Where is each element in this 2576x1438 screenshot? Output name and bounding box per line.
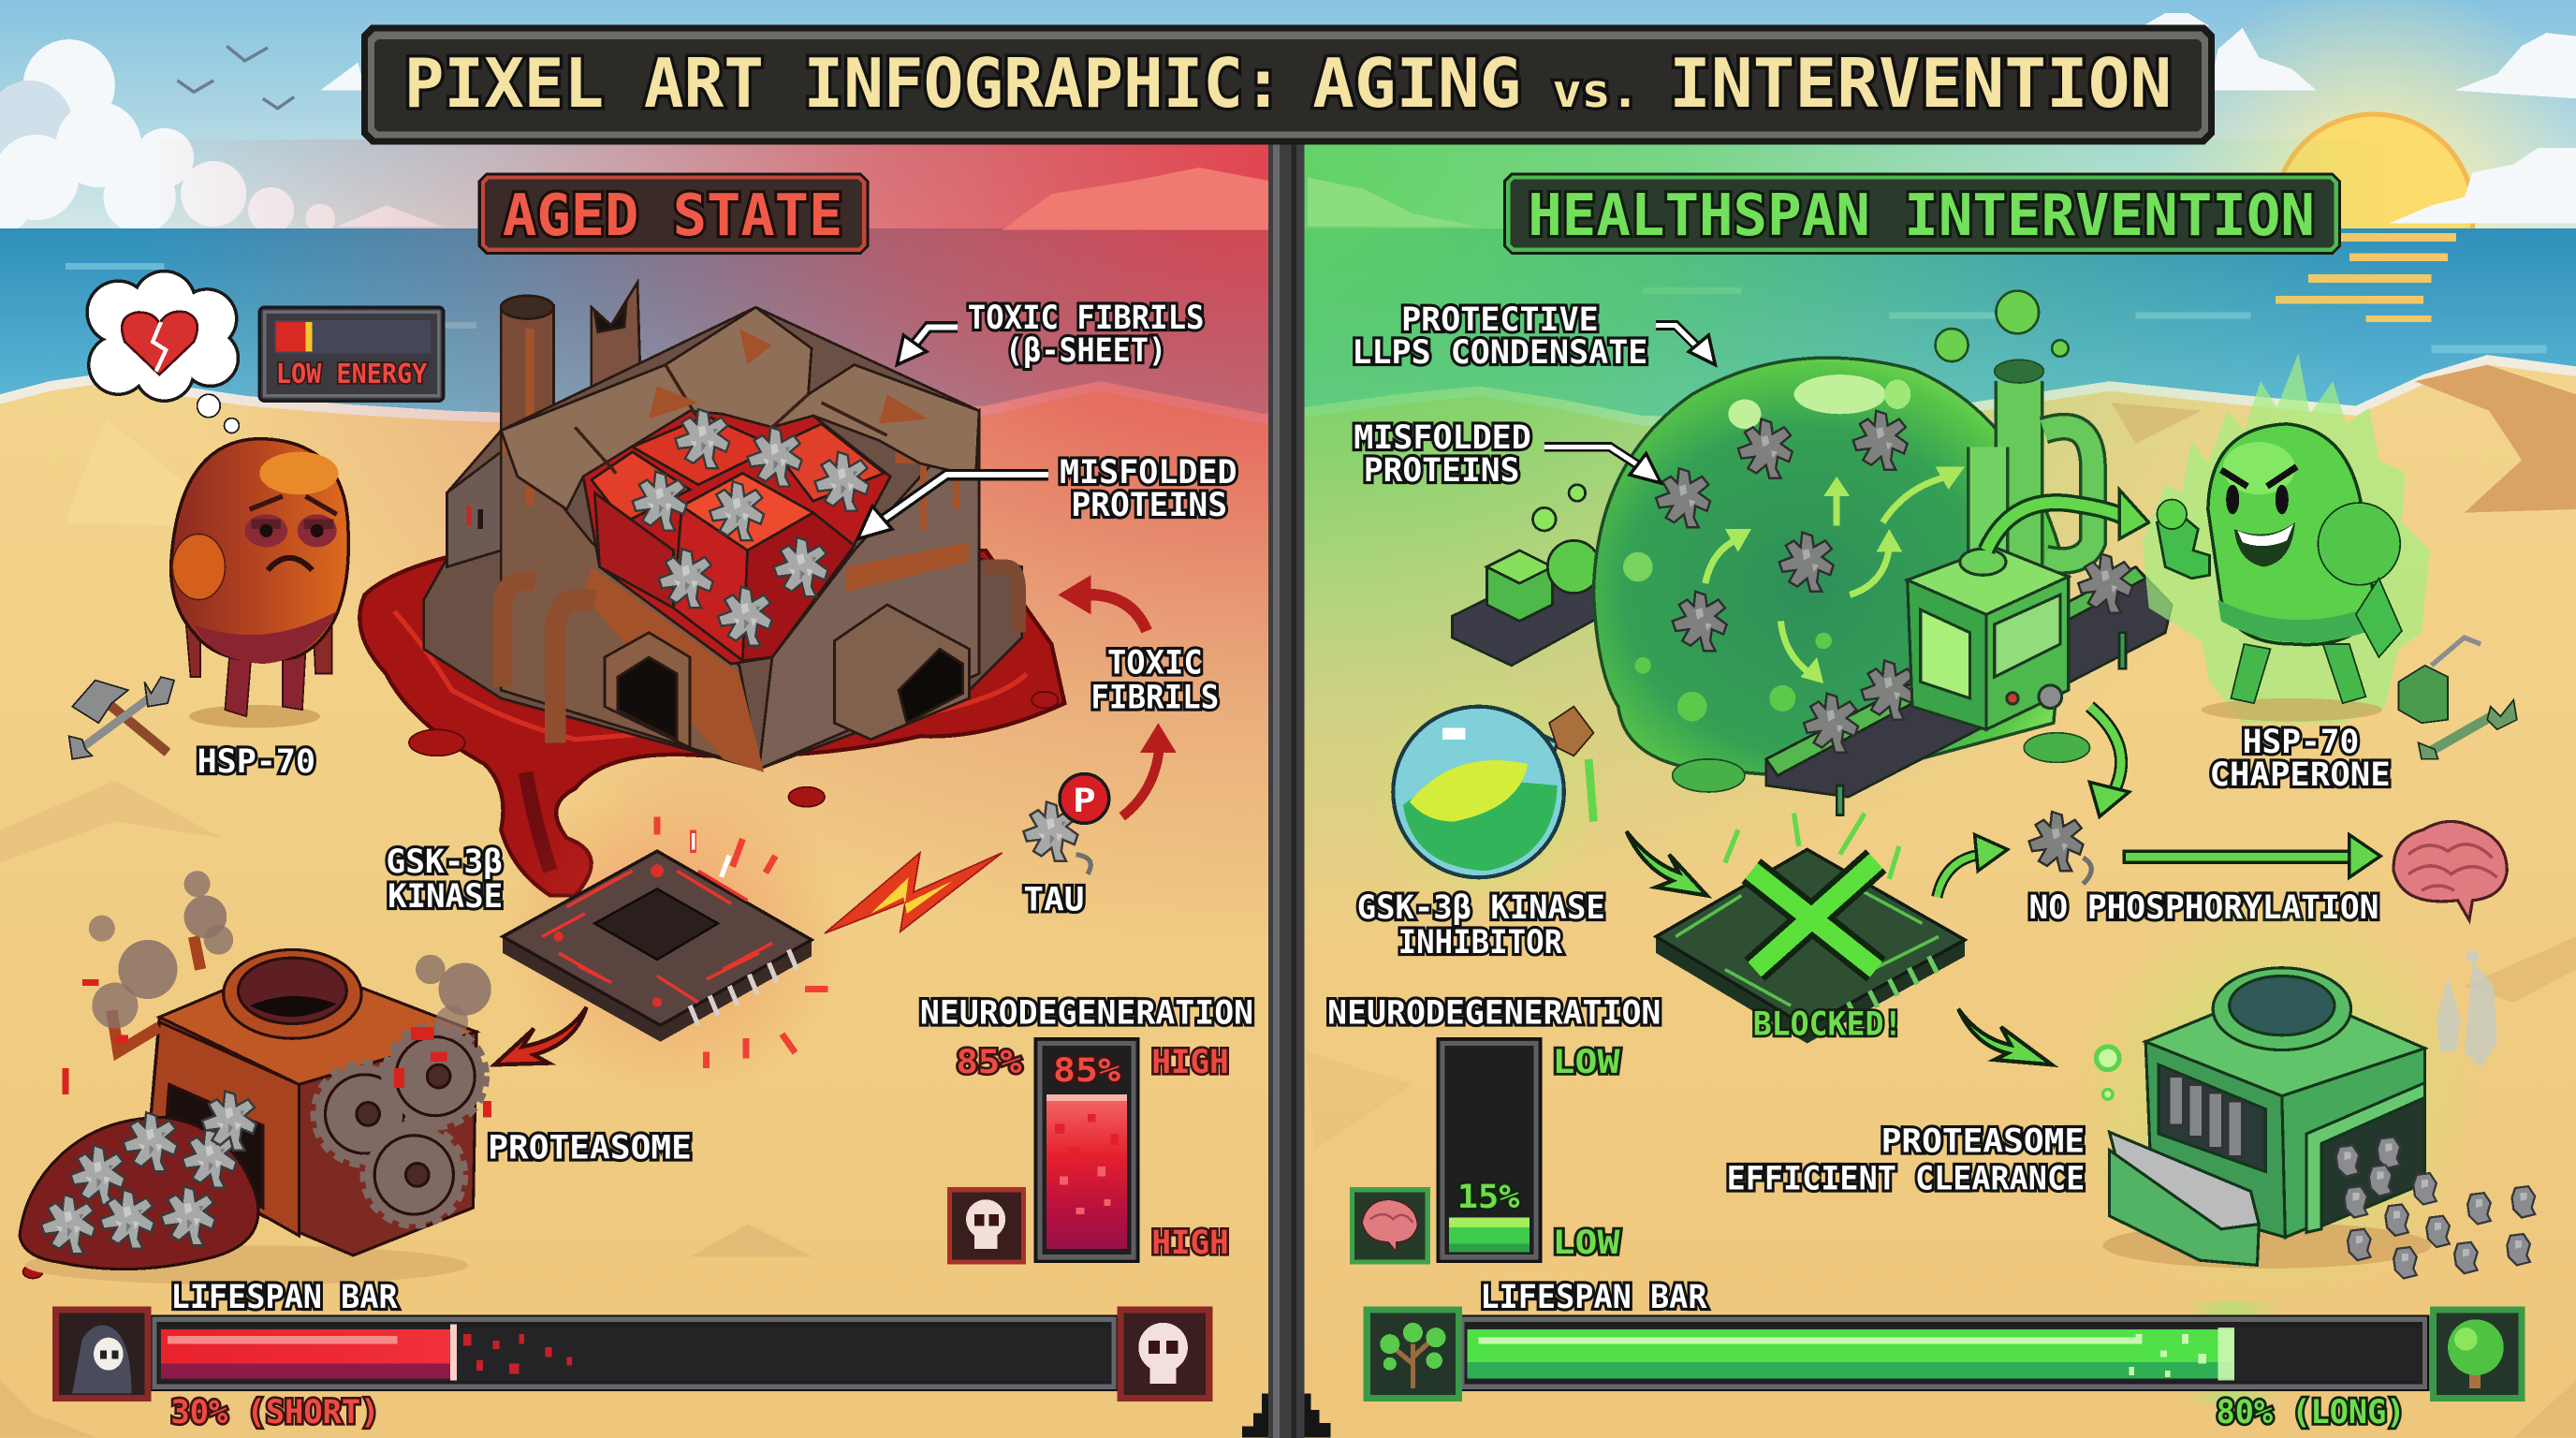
callout: misfolded proteins [857,453,1237,539]
tau protein with phosphate: P [1073,782,1096,820]
colour wash left [201,139,1268,893]
clearance machine [1908,547,2069,729]
proteasome funnel [224,949,361,1038]
title banner: AGING [1312,44,1521,123]
heading: healthspan intervention: HEALTHSPAN INTERVENTION [1528,183,2315,249]
icon: reaper tile [56,1310,148,1399]
callout: toxic fibrils cycle [1058,575,1219,816]
chip: overactive GSK-3β kinase [501,756,846,1101]
label: proteasome efficient clearance: EFFICIENT CLEARANCE [1727,1160,2085,1198]
gears [315,1027,485,1225]
neurodegeneration meter: low: LOW [1553,1043,1621,1081]
chip: blocked kinase [1656,814,1965,1043]
toxic protein clusters [633,409,869,646]
factory doors [605,605,970,748]
center divider [1242,139,1331,1438]
rust streaks [503,440,974,772]
arrow: kinase to proteasome [494,1007,587,1064]
main conveyor [1766,553,2172,815]
label: proteasome: PROTEASOME [488,1128,692,1167]
icon: broken tools [69,677,174,759]
arrow: kinase to proteasome [1958,1009,2052,1064]
sun [2152,0,2576,419]
callout: toxic fibrils cycle: TOXIC [1107,644,1203,682]
callout: toxic fibrils beta sheet: TOXIC FIBRILS [968,299,1204,337]
clouds left [0,39,444,233]
lifespan bar: short: LIFESPAN BAR [171,1278,399,1316]
panel: healthspan intervention [1327,291,2535,1431]
exposed red core [583,411,890,664]
machine exit door [2306,1083,2425,1232]
neurodegeneration meter: high [920,993,1253,1262]
pipes [503,567,1018,742]
clogged protein pile [20,1091,258,1269]
ruined factory [424,283,1022,772]
label: proteasome efficient clearance [1727,1122,2085,1198]
callout: misfolded proteins right: MISFOLDED [1354,418,1531,457]
cleared protein pellets [2336,1137,2535,1278]
neurodegeneration meter: high: HIGH [1151,1224,1229,1262]
panel: aged state [20,270,1253,1431]
icon: sapling tile [1367,1310,1459,1399]
machine grinder opening [2159,1064,2265,1171]
arrow: machine to hero [1986,490,2149,550]
label: blocked: BLOCKED! [1753,1005,1902,1044]
callout: protective condensate [1352,301,1715,372]
callout: toxic fibrils cycle: FIBRILS [1090,678,1219,716]
efficient proteasome machine [2070,896,2481,1306]
smoke and sparks [63,871,491,1117]
title banner: PIXEL ART INFOGRAPHIC: [404,44,1283,123]
neurodegeneration meter: low: NEURODEGENERATION [1327,993,1661,1032]
tau: no phosphorylation [2029,812,2378,927]
callout: misfolded proteins: MISFOLDED [1060,453,1237,492]
heading: aged state: AGED STATE [503,183,842,249]
green pipes [1988,360,2093,567]
label: GSK-3β kinase [386,843,503,916]
lifespan bar: long: 80% (LONG) [2217,1393,2405,1431]
LLPS condensate blob [1593,358,2089,792]
neurodegeneration meter: high: 85% [956,1043,1022,1081]
chimneys [501,283,642,487]
tau protein with phosphate [1023,774,1109,874]
label: HSP-70: HSP-70 [198,742,315,781]
machine funnel [2213,968,2351,1050]
character: strong HSP-70 chaperone [2143,353,2430,723]
callout: toxic fibrils beta sheet [897,299,1204,370]
clouds right [2143,13,2576,224]
label: tau: TAU [1023,880,1084,918]
neurodegeneration meter: high: HIGH [1151,1043,1229,1081]
neurodegeneration meter: high: NEURODEGENERATION [920,993,1253,1032]
birds [178,46,294,109]
icon: lightning bolt [825,853,1003,933]
callout: protective condensate: LLPS CONDENSATE [1352,333,1647,372]
tinted clouds [1003,168,1479,230]
flask: kinase inhibitor potion [1368,675,1605,912]
icon: grown tree tile [2433,1310,2522,1399]
title banner: INTERVENTION [1669,44,2172,123]
lifespan bar: long [1459,1278,2428,1431]
sun reflection [2276,233,2456,322]
thought bubble: broken heart [85,270,240,433]
callout: misfolded proteins: PROTEINS [1071,486,1227,524]
side pipes [111,936,200,1051]
lifespan bar: short: 30% (SHORT) [171,1393,379,1431]
icon: healthy brain [2393,821,2507,920]
roof slabs [501,307,979,509]
arrow: kinase to tau [1937,835,2008,897]
icon: skull end tile [1120,1310,1209,1399]
big green X [1751,861,1876,970]
neurodegeneration meter: low: LOW [1553,1224,1621,1262]
label: HSP-70 chaperone: CHAPERONE [2210,756,2391,794]
colour wash right [1305,139,2320,886]
internal flow arrows [1705,477,1949,677]
low energy gauge [259,307,444,401]
lifespan bar: short [151,1278,1117,1431]
icon: brain tile [1352,1190,1427,1262]
tau: no phosphorylation: NO PHOSPHORYLATION [2029,888,2378,927]
label: GSK-3β kinase: KINASE [388,877,503,916]
callout: misfolded proteins right: PROTEINS [1364,451,1519,490]
exhaust and glow rings [2097,949,2497,1099]
blood pool [23,550,1064,1278]
label: GSK-3β kinase inhibitor: GSK-3β KINASE [1357,888,1605,927]
neurodegeneration meter: low: 15% [1457,1178,1519,1216]
arrow: tau to healthy brain [2124,835,2380,877]
left conveyor [1453,485,1618,666]
lifespan bar: long: LIFESPAN BAR [1480,1278,1707,1316]
neurodegeneration meter: low [1327,993,1661,1262]
label: GSK-3β kinase inhibitor [1357,888,1605,961]
arrow: machine to tau [2089,707,2130,816]
title banner: vs. [1553,64,1640,118]
neurodegeneration meter: high: 85% [1053,1051,1120,1090]
label: proteasome efficient clearance: PROTEASOME [1881,1122,2085,1160]
trapped proteins [1656,411,1908,651]
character: tired HSP-70 [171,439,348,728]
floating droplets [1936,291,2069,361]
callout: misfolded proteins right [1354,418,1661,490]
label: GSK-3β kinase inhibitor: INHIBITOR [1398,923,1563,961]
icon: oil can and wrench [2398,638,2517,759]
dunes [0,365,2576,1438]
icon: skull tile [949,1190,1023,1262]
label: HSP-70 chaperone: HSP-70 [2243,723,2359,761]
arrow: inhibitor to kinase [1627,831,1707,896]
callout: protective condensate: PROTECTIVE [1401,301,1599,339]
callout: toxic fibrils beta sheet: (β-SHEET) [1005,331,1166,370]
broken proteasome machine [20,936,485,1284]
title banner [361,24,2215,144]
label: GSK-3β kinase: GSK-3β [386,843,503,881]
label: HSP-70 chaperone [2210,723,2391,794]
machine hopper [2110,1132,2259,1229]
factory body [424,307,1022,769]
low energy gauge: LOW ENERGY [276,359,427,389]
